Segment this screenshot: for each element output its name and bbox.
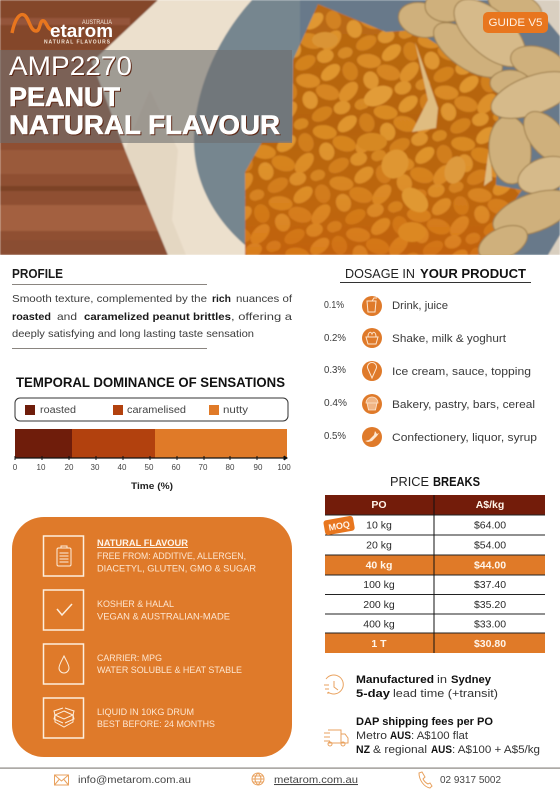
stacked bar chart: 10 xyxy=(37,463,46,472)
dosage row: drink: Drink, juice xyxy=(392,300,448,312)
stacked bar chart: 60 xyxy=(172,463,181,472)
footer: 02 9317 5002 xyxy=(440,774,501,786)
dosage list xyxy=(324,296,537,447)
dosage row: ice cream: Ice cream, sauce, topping xyxy=(392,366,531,378)
attribute text: DIACETYL, GLUTEN, GMO & SUGAR xyxy=(97,564,256,574)
dosage row: ice cream xyxy=(324,361,531,381)
price table: 20 kg xyxy=(366,540,392,552)
profile text: caramelized peanut brittles xyxy=(84,312,231,323)
shipping text: Metro xyxy=(356,730,387,742)
icon: delivery truck xyxy=(324,730,348,746)
attribute text: VEGAN & AUSTRALIAN-MADE xyxy=(97,612,230,622)
title band xyxy=(0,50,292,143)
manufacturing text: in xyxy=(437,674,447,686)
logo: Metarom xyxy=(12,15,113,46)
legend: roasted xyxy=(40,405,76,416)
attribute text: BEST BEFORE: 24 MONTHS xyxy=(97,719,215,730)
heading: price breaks xyxy=(390,474,480,489)
shipping text: AUS xyxy=(431,744,452,756)
footer: info@metarom.com.au xyxy=(78,774,191,786)
panel: product attributes xyxy=(12,517,292,757)
dosage row: confectionery: 0.5% xyxy=(324,430,346,442)
stacked bar chart: 90 xyxy=(254,463,263,472)
tag: MOQ: MOQ xyxy=(328,519,351,533)
badge: guide version xyxy=(483,12,548,33)
dosage row: confectionery: Confectionery, liquor, syrup xyxy=(392,432,537,444)
legend: nutty xyxy=(223,405,248,416)
logo: Metarom: AUSTRALIA xyxy=(82,20,112,26)
icon: envelope xyxy=(54,775,68,785)
stacked bar chart: 80 xyxy=(226,463,235,472)
price table: $37.40 xyxy=(474,579,506,591)
dosage row: ice cream: 0.3% xyxy=(324,364,346,376)
price table: PO xyxy=(371,499,387,511)
tag: MOQ xyxy=(323,516,355,535)
profile text: nuances of xyxy=(236,294,292,305)
shipping text: & regional xyxy=(373,744,427,756)
profile text: and xyxy=(57,312,77,323)
icon: water drop xyxy=(44,644,84,684)
attribute text xyxy=(97,538,256,730)
footer: metarom.com.au xyxy=(274,774,358,786)
manufacturing text: lead time (+transit) xyxy=(393,688,498,700)
icon: clock xyxy=(324,675,343,694)
dosage row: shake xyxy=(324,328,506,348)
stacked bar chart: Time (%) xyxy=(131,481,173,492)
dosage row: shake: 0.2% xyxy=(324,332,346,344)
attribute text: LIQUID IN 10KG DRUM xyxy=(97,707,194,718)
dosage row: drink xyxy=(324,296,448,316)
stacked bar chart: 50 xyxy=(145,463,154,472)
title xyxy=(9,51,281,141)
logo: Metarom: etarom xyxy=(50,21,113,41)
title: PEANUT xyxy=(10,83,121,113)
badge: guide version: GUIDE V5 xyxy=(488,17,542,29)
shipping text: DAP shipping fees per PO xyxy=(356,716,493,728)
legend: caramelised xyxy=(127,405,186,416)
logo: Metarom: NATURAL FLAVOURS xyxy=(44,40,111,46)
stacked bar chart: 0 xyxy=(13,463,18,472)
title: AMP2270 xyxy=(10,52,133,82)
stacked bar chart: 20 xyxy=(65,463,74,472)
dosage row: bakery xyxy=(324,394,535,414)
icon: globe xyxy=(252,773,264,785)
price table: $35.20 xyxy=(474,599,506,611)
attribute text: FREE FROM: ADDITIVE, ALLERGEN, xyxy=(97,551,246,562)
profile text: deeply satisfying and long lasting taste sensation xyxy=(12,329,254,340)
price table: 1 T xyxy=(371,638,387,650)
stacked bar chart: 30 xyxy=(91,463,100,472)
shipping text: : A$100 flat xyxy=(411,730,468,742)
shipping text: NZ xyxy=(356,744,370,756)
shipping text xyxy=(356,716,540,756)
manufacturing text: Manufactured xyxy=(356,674,434,686)
dosage row: drink: 0.1% xyxy=(324,299,344,311)
icon: check mark xyxy=(44,590,84,630)
manufacturing text: Sydney xyxy=(451,674,492,686)
price table: 10 kg xyxy=(366,520,392,532)
title: PEANUT xyxy=(9,82,120,112)
price table: $54.00 xyxy=(474,540,506,552)
profile text: roasted xyxy=(12,312,51,323)
heading: price breaks: BREAKS xyxy=(433,474,480,489)
title: NATURAL FLAVOUR xyxy=(9,110,280,140)
brittle pieces xyxy=(245,4,522,255)
legend xyxy=(15,398,288,421)
footer xyxy=(0,768,560,788)
shipping text: AUS xyxy=(390,730,411,742)
heading: dosage: DOSAGE IN xyxy=(345,266,415,281)
manufacturing text: 5-day xyxy=(356,688,391,700)
icon: open box xyxy=(44,698,84,738)
heading: profile: PROFILE xyxy=(12,267,63,281)
dosage row: confectionery xyxy=(324,427,537,447)
heading: dosage xyxy=(340,266,531,283)
manufacturing text xyxy=(356,674,498,700)
price table: 40 kg xyxy=(366,560,392,572)
price table: A$/kg xyxy=(476,499,504,511)
dosage row: bakery: Bakery, pastry, bars, cereal xyxy=(392,399,535,411)
shipping text: : A$100 + A$5/kg xyxy=(452,744,540,756)
price table: 200 kg xyxy=(363,599,395,611)
attribute text: CARRIER: MPG xyxy=(97,653,162,664)
icon: clipboard xyxy=(44,536,84,576)
profile text xyxy=(12,294,292,340)
icon: phone xyxy=(419,772,432,788)
price table: $44.00 xyxy=(474,560,506,572)
hero photo: peanut brittle on a plate xyxy=(0,0,560,268)
title: AMP2270 xyxy=(9,51,132,81)
stacked bar chart: 100 xyxy=(277,463,291,472)
chart heading: TEMPORAL DOMINANCE OF SENSATIONS xyxy=(16,375,285,390)
heading: price breaks: PRICE xyxy=(390,474,429,489)
profile text: , offering a xyxy=(231,312,292,323)
price table: $33.00 xyxy=(474,618,506,630)
attribute text: KOSHER & HALAL xyxy=(97,599,174,610)
dosage row: shake: Shake, milk & yoghurt xyxy=(392,333,506,345)
price table xyxy=(325,495,545,653)
price table: 400 kg xyxy=(363,618,395,630)
profile text: rich xyxy=(212,294,231,305)
profile text: Smooth texture, complemented by the xyxy=(12,294,207,305)
stacked bar chart: 40 xyxy=(118,463,127,472)
price table: $30.80 xyxy=(474,638,506,650)
dosage row: bakery: 0.4% xyxy=(324,397,347,409)
peanut shells xyxy=(394,0,560,268)
price table: $64.00 xyxy=(474,520,506,532)
stacked bar chart xyxy=(13,429,291,492)
attribute text: NATURAL FLAVOUR xyxy=(97,538,188,549)
attribute text: WATER SOLUBLE & HEAT STABLE xyxy=(97,665,242,676)
title: NATURAL FLAVOUR xyxy=(10,111,281,141)
stacked bar chart: 70 xyxy=(199,463,208,472)
heading: dosage: YOUR PRODUCT xyxy=(420,266,526,281)
price table: 100 kg xyxy=(363,579,395,591)
